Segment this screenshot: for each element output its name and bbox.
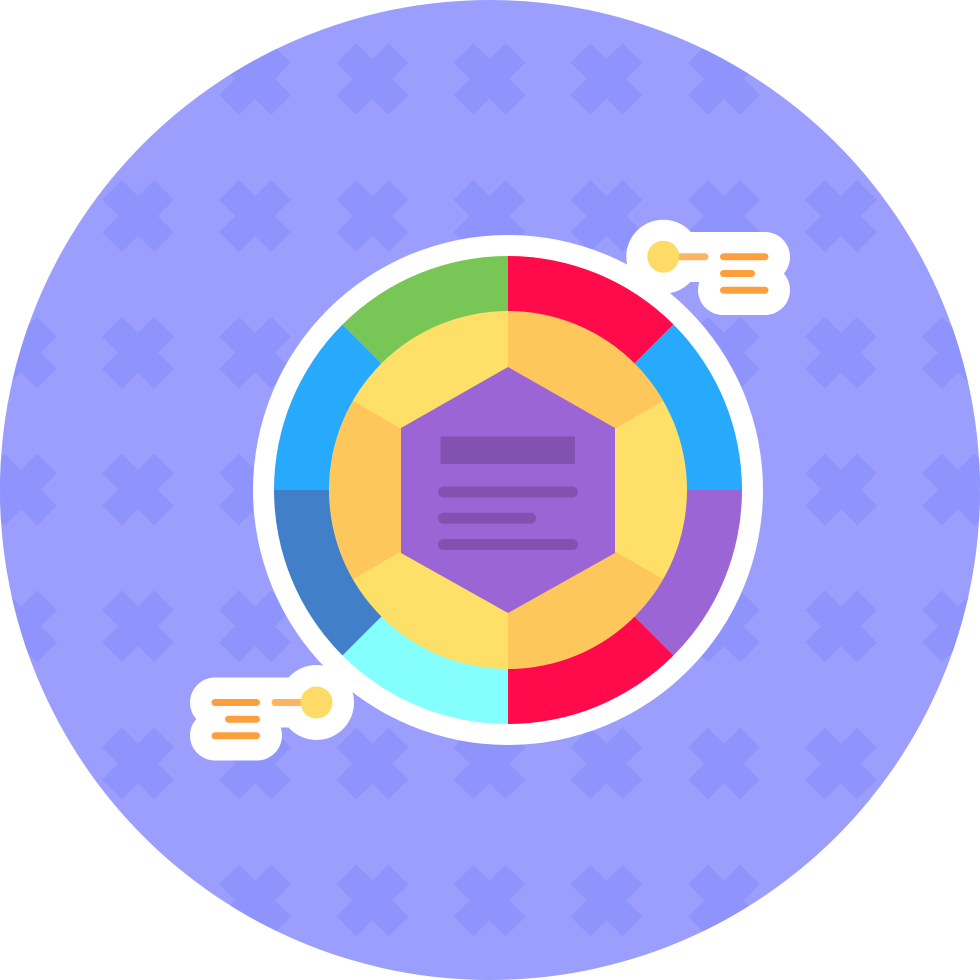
segment: orange left: [329, 401, 508, 579]
callout: bottom left: [212, 686, 332, 739]
outer ring segments: [274, 256, 742, 724]
segment: green: [342, 256, 508, 490]
text placeholder line 3: [438, 539, 578, 550]
white sticker backing: [215, 220, 765, 745]
segment: red top: [508, 256, 674, 490]
title placeholder bar: [440, 436, 575, 464]
callout: top right: [647, 241, 768, 294]
text placeholder line 2: [438, 513, 536, 524]
icon: dot: [300, 686, 332, 718]
segment: red bottom: [508, 490, 674, 724]
icon: dot: [647, 241, 679, 273]
segment: orange top right: [508, 311, 663, 490]
segment: cyan: [342, 490, 508, 724]
segment: purple: [508, 490, 742, 656]
connector: [670, 253, 708, 260]
inner ring base: yellow: [329, 311, 687, 669]
inner ring segments: [329, 311, 687, 669]
center hexagon card: [401, 367, 615, 613]
text placeholder line 1: [438, 486, 578, 498]
segment: orange bottom right: [508, 490, 663, 669]
callout text lines: [212, 699, 260, 739]
segment: dark blue: [274, 490, 508, 656]
connector: [272, 699, 310, 706]
callout text lines: [720, 253, 768, 294]
segment: blue left: [274, 324, 508, 490]
segment: blue right: [508, 324, 742, 490]
